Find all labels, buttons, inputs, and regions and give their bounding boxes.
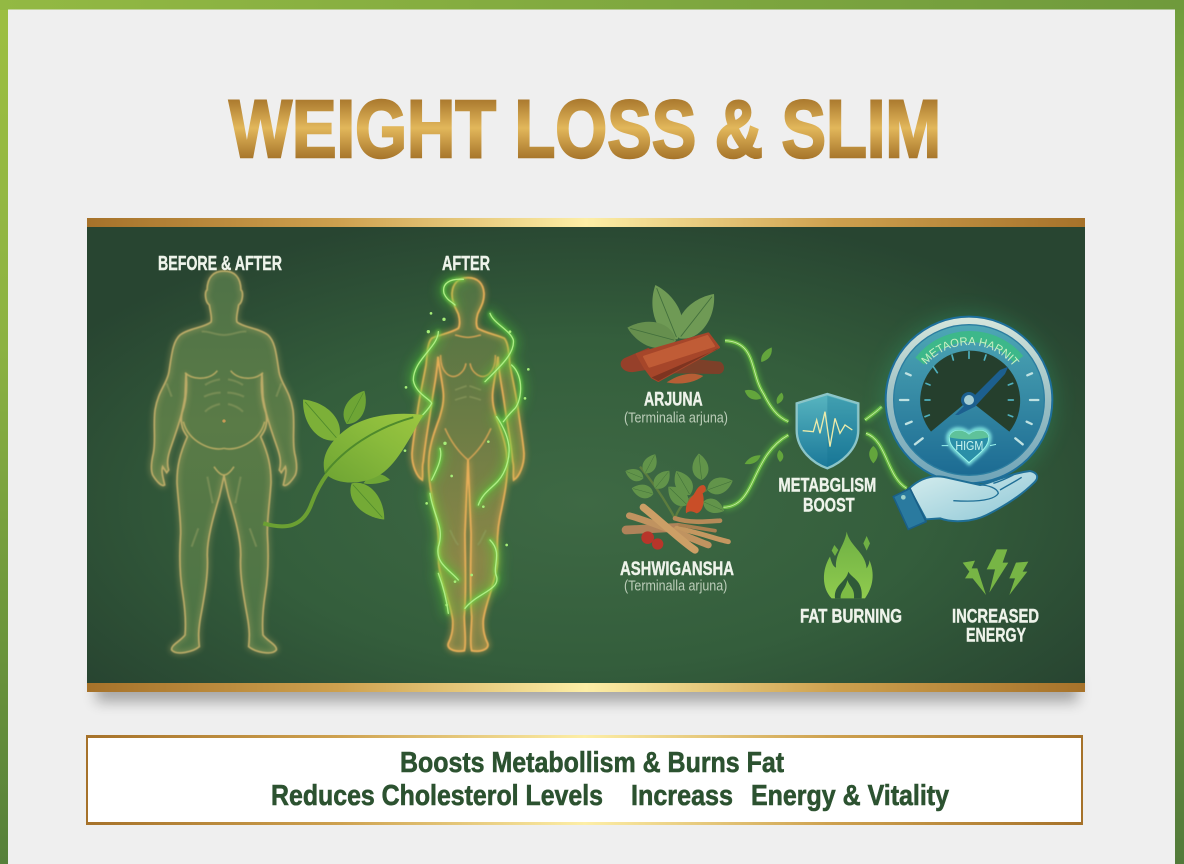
text: benefit line two: Energy & Vitality (751, 780, 949, 812)
before and after figures (151, 271, 530, 653)
herbs, metabolism and benefits illustration (620, 285, 1060, 647)
text: increased energy: ENERGY (966, 626, 1026, 647)
icon: metabolism shield (797, 394, 858, 468)
figure: after body with green energy (404, 278, 530, 651)
icon: ashwagandha plant and roots (623, 451, 735, 550)
text: metabolism boost: METABGLISM (778, 476, 876, 497)
panel: main green illustration (87, 218, 1086, 710)
glowing connector vines (723, 341, 907, 507)
text: arjuna name: ARJUNA (644, 390, 703, 411)
icon: supporting hand (893, 471, 1037, 529)
bottom gold band (87, 683, 1085, 692)
text: metabolism boost (778, 476, 876, 517)
label: before and after: BEFORE & AFTER (158, 253, 282, 275)
top gold band (87, 218, 1085, 227)
text: benefit line two: Reduces Cholesterol Levels (271, 780, 603, 812)
panel shadow (96, 678, 1078, 702)
icon: arjuna leaves and bark (622, 280, 724, 384)
text: arjuna latin name: (Terminalia arjuna) (624, 411, 728, 427)
figure: before body (151, 271, 297, 653)
icon: green leaf sprig connecting the figures (263, 386, 423, 527)
icon: energy bolts (963, 549, 1028, 595)
icon: speedometer gauge: METAORA HARNIT (921, 337, 1020, 365)
label: after: AFTER (442, 253, 490, 275)
text: benefit line one: Boosts Metabollism & Burns Fat (400, 747, 784, 779)
panel background (87, 218, 1085, 692)
icon: flame (824, 532, 873, 598)
text: ashwagansha latin name: (Terminalla arjuna) (624, 579, 727, 595)
text: increased energy: INCREASED (952, 607, 1039, 628)
icon: speedometer gauge: HIGM (955, 439, 983, 453)
text: ashwagansha name: ASHWIGANSHA (620, 559, 734, 580)
title: WEIGHT LOSS & SLIM (229, 84, 941, 175)
text: benefit line two: Increass (631, 780, 733, 812)
icon: speedometer gauge (874, 309, 1060, 484)
text: benefit line two (271, 780, 949, 812)
panel: benefits box (86, 735, 1083, 825)
text: fat burning: FAT BURNING (800, 607, 902, 628)
text: increased energy (952, 607, 1039, 647)
text: metabolism boost: BOOST (803, 496, 855, 517)
